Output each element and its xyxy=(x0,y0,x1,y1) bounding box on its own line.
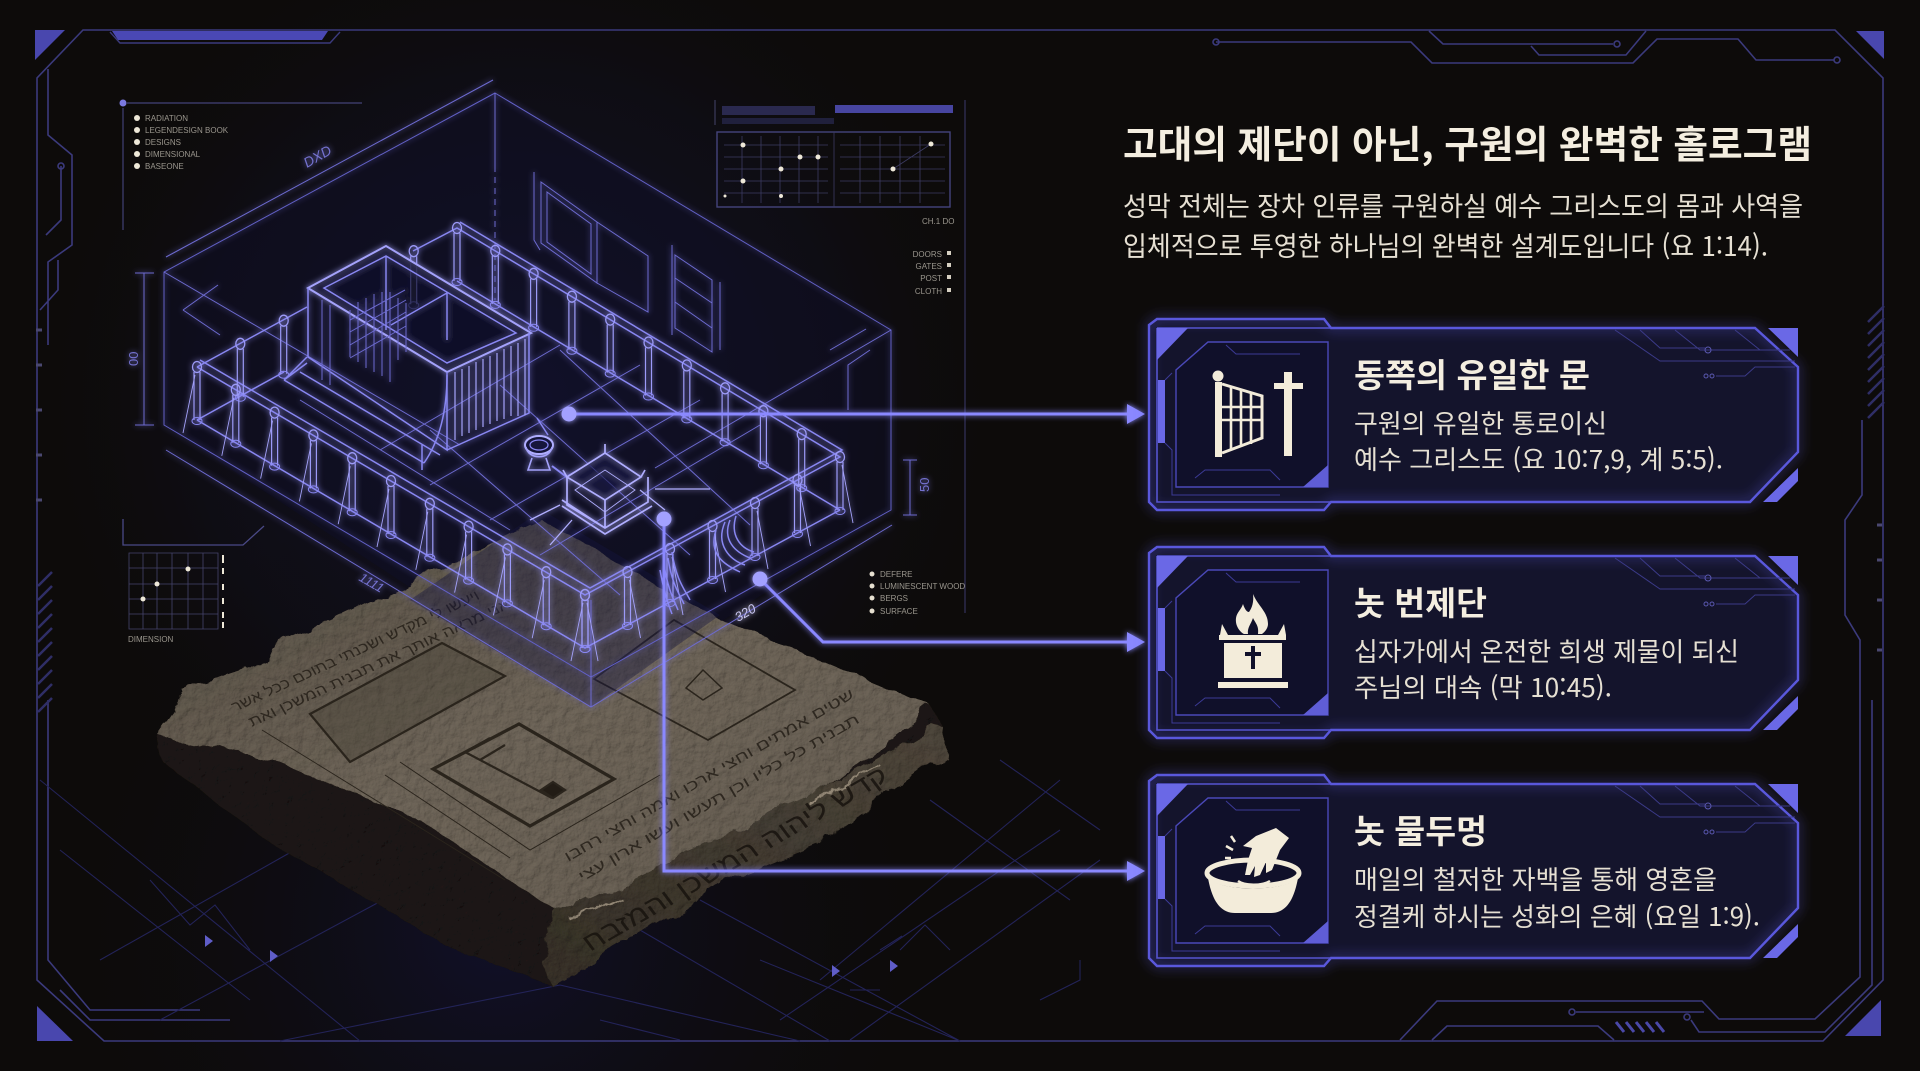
legend: right xyxy=(913,250,951,296)
engraved inscription: קדש ליהוה המשכן והמזבח xyxy=(576,760,894,957)
legend: right: CLOTH xyxy=(915,287,942,296)
engraved inscription: תבנית כל כליו וכן תעשו ועשו ארון עצי xyxy=(575,711,862,885)
hologram shade over stone xyxy=(410,510,720,707)
holographic tabernacle blueprint xyxy=(126,80,932,707)
bounding box: 1111 xyxy=(357,570,387,596)
gate curtains xyxy=(660,516,754,614)
card body: 주님의 대속 (막 10:45). xyxy=(1354,668,1612,705)
card body: 십자가에서 온전한 희생 제물이 되신 xyxy=(1354,632,1739,669)
intro text xyxy=(1123,185,1803,264)
lower blueprint haze xyxy=(0,470,1000,1071)
hologram box backing xyxy=(164,93,891,707)
legend: right: GATES xyxy=(915,262,942,271)
bounding box xyxy=(126,80,932,707)
card heading: 놋 번제단 xyxy=(1354,577,1487,625)
intro text: 성막 전체는 장차 인류를 구원하실 예수 그리스도의 몸과 사역을 xyxy=(1123,185,1803,224)
card body: 구원의 유일한 통로이신 xyxy=(1354,404,1607,441)
bounding box: DXD xyxy=(301,142,334,171)
card body: 매일의 철저한 자백을 통해 영혼을 xyxy=(1354,860,1717,897)
legend: top left: RADIATION xyxy=(145,114,188,123)
stone body xyxy=(157,520,947,987)
card body xyxy=(1354,404,1723,477)
icon: basin with hand xyxy=(1207,828,1299,913)
card body: 정결케 하시는 성화의 은혜 (요일 1:9). xyxy=(1354,897,1760,934)
legend: lower right: DEFERE xyxy=(880,570,912,579)
title: 고대의 제단이 아닌, 구원의 완벽한 홀로그램 xyxy=(1123,114,1812,169)
card frame xyxy=(1149,319,1798,510)
charts: top right xyxy=(715,100,954,226)
card frame xyxy=(1149,547,1798,738)
legend: top left: DESIGNS xyxy=(145,138,181,147)
engraved inscription: שטים אמתים וחצי ארכו ואמה וחצי רחבו xyxy=(561,686,857,865)
card: east gate xyxy=(1149,319,1798,510)
bronze altar xyxy=(530,444,710,545)
icon: altar with flame xyxy=(1218,594,1288,688)
legend: lower right xyxy=(870,100,965,616)
blueprint lines under the stone xyxy=(40,760,1100,1041)
back fence posts xyxy=(235,222,807,492)
card body: 예수 그리스도 (요 10:7,9, 계 5:5). xyxy=(1354,440,1723,477)
engraved plans on stone xyxy=(262,620,795,880)
front fence posts with guy ropes xyxy=(183,362,853,661)
icon: gate and cross xyxy=(1212,370,1303,457)
chart: lower left: DIMENSION xyxy=(128,635,174,644)
legend: top left: BASEONE xyxy=(145,162,184,171)
card body xyxy=(1354,860,1760,934)
card body xyxy=(1354,632,1739,705)
engraved inscription xyxy=(228,587,894,957)
legend: top left xyxy=(120,100,362,230)
fence rails xyxy=(197,222,842,648)
legend: lower right: LUMINESCENT WOOD xyxy=(880,582,965,591)
chart: lower left xyxy=(123,519,264,644)
connector: gate xyxy=(562,404,1145,424)
legend: right: POST xyxy=(920,274,942,283)
connector: laver xyxy=(656,512,1145,881)
engraved inscription: אני מראה אותך את תבנית המשכן ואת xyxy=(246,597,514,730)
intro text: 입체적으로 투영한 하나님의 완벽한 설계도입니다 (요 1:14). xyxy=(1123,225,1768,264)
legend: right: DOORS xyxy=(913,250,942,259)
floating elevation drawings xyxy=(534,172,720,352)
card: bronze laver xyxy=(1149,775,1798,966)
ancient stone slab xyxy=(157,510,947,987)
laver xyxy=(525,436,568,478)
tabernacle xyxy=(284,246,548,470)
bounding box: 50 xyxy=(917,478,932,492)
card heading: 동쪽의 유일한 문 xyxy=(1354,349,1590,397)
legend: top left: LEGENDESIGN BOOK xyxy=(145,126,229,135)
card frame xyxy=(1149,775,1798,966)
blueprint annotations xyxy=(120,100,965,644)
card heading: 놋 물두멍 xyxy=(1354,805,1487,853)
blueprint haze xyxy=(0,0,1060,920)
courtyard floor xyxy=(300,345,760,595)
legend: top left: DIMENSIONAL xyxy=(145,150,201,159)
bounding box: 00 xyxy=(126,352,141,366)
charts: top right: CH.1 DO xyxy=(922,217,954,226)
legend: lower right: SURFACE xyxy=(880,607,918,616)
legend: lower right: BERGS xyxy=(880,594,908,603)
connector: altar xyxy=(752,572,1145,652)
bounding box: 320 xyxy=(732,600,759,625)
engraved inscription: ויעשו לי מקדש ושכנתי בתוכם ככל אשר xyxy=(228,587,483,715)
card: bronze altar xyxy=(1149,547,1798,738)
